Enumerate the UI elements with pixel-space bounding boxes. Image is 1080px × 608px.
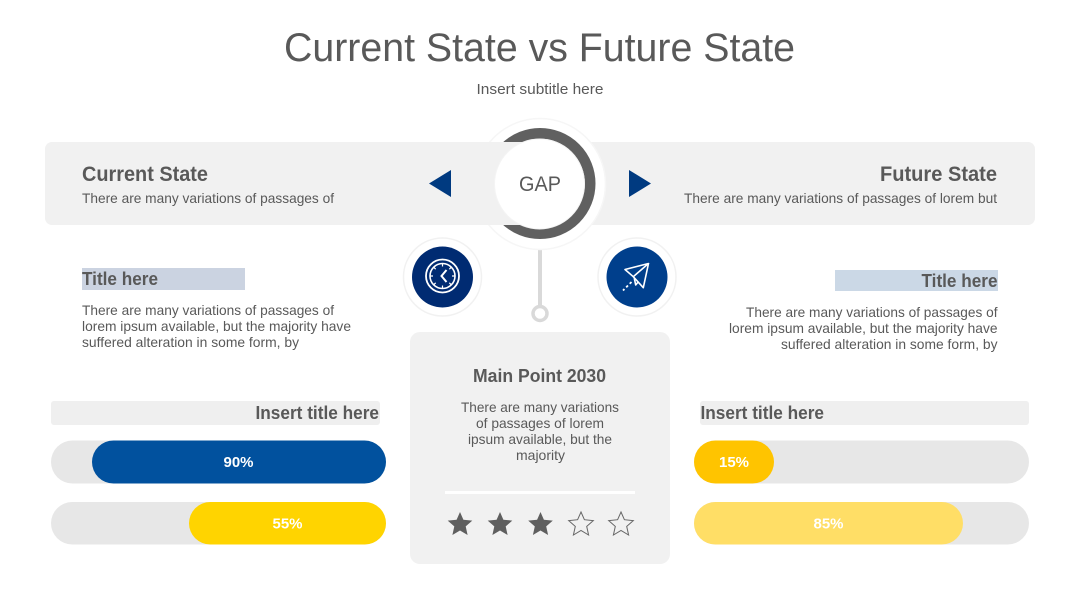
main point text: of passages of lorem	[476, 415, 604, 431]
left text block: suffered alteration in some form, by	[82, 334, 299, 350]
connector stem	[533, 248, 547, 320]
current state heading: Current State	[82, 163, 208, 186]
icon: paper plane	[598, 238, 676, 316]
left text block: lorem ipsum available, but the majority have	[82, 318, 351, 334]
bar: 90%: 90%	[224, 454, 254, 471]
bar: 90%	[51, 440, 386, 484]
right text block: There are many variations of passages of	[746, 304, 998, 320]
right bar title	[700, 401, 1029, 425]
main point text: There are many variations	[461, 399, 619, 415]
gap dial	[470, 118, 606, 250]
current state heading: There are many variations of passages of	[82, 190, 334, 206]
left text block: There are many variations of passages of	[82, 302, 334, 318]
main point text	[461, 399, 619, 463]
bar: 15%	[694, 440, 1029, 484]
main point text: ipsum available, but the	[468, 431, 612, 447]
main point text: majority	[516, 447, 565, 463]
right text block: lorem ipsum available, but the majority have	[729, 320, 998, 336]
icon: clock	[404, 238, 482, 316]
gap dial: GAP	[519, 173, 561, 196]
future state heading	[684, 163, 997, 206]
bar: 55%: 55%	[272, 516, 302, 532]
right bar title: Insert title here	[700, 403, 824, 423]
left bar title: Insert title here	[256, 403, 379, 423]
right title highlight	[835, 270, 998, 291]
future state heading: There are many variations of passages of lorem but	[684, 190, 997, 206]
subtitle: Insert subtitle here	[476, 81, 604, 98]
future state heading: Future State	[880, 163, 997, 186]
left title highlight: Title here	[82, 269, 158, 289]
left bar title	[51, 401, 380, 425]
arrow: right	[629, 170, 651, 197]
title: Current State vs Future State	[284, 26, 795, 70]
left title highlight	[82, 268, 245, 290]
comparison band	[45, 142, 1035, 225]
arrow: left	[429, 170, 451, 197]
star rating	[448, 512, 633, 535]
current state heading	[82, 163, 334, 206]
bar: 15%: 15%	[719, 454, 749, 471]
right text block	[729, 304, 998, 352]
bar: 85%: 85%	[814, 516, 844, 532]
panel: main point	[410, 332, 670, 564]
right text block: suffered alteration in some form, by	[781, 336, 998, 352]
main point heading: Main Point 2030	[473, 366, 606, 386]
left text block	[82, 302, 351, 350]
bar: 55%	[51, 502, 386, 544]
bar: 85%	[694, 502, 1029, 544]
right title highlight: Title here	[922, 271, 998, 291]
